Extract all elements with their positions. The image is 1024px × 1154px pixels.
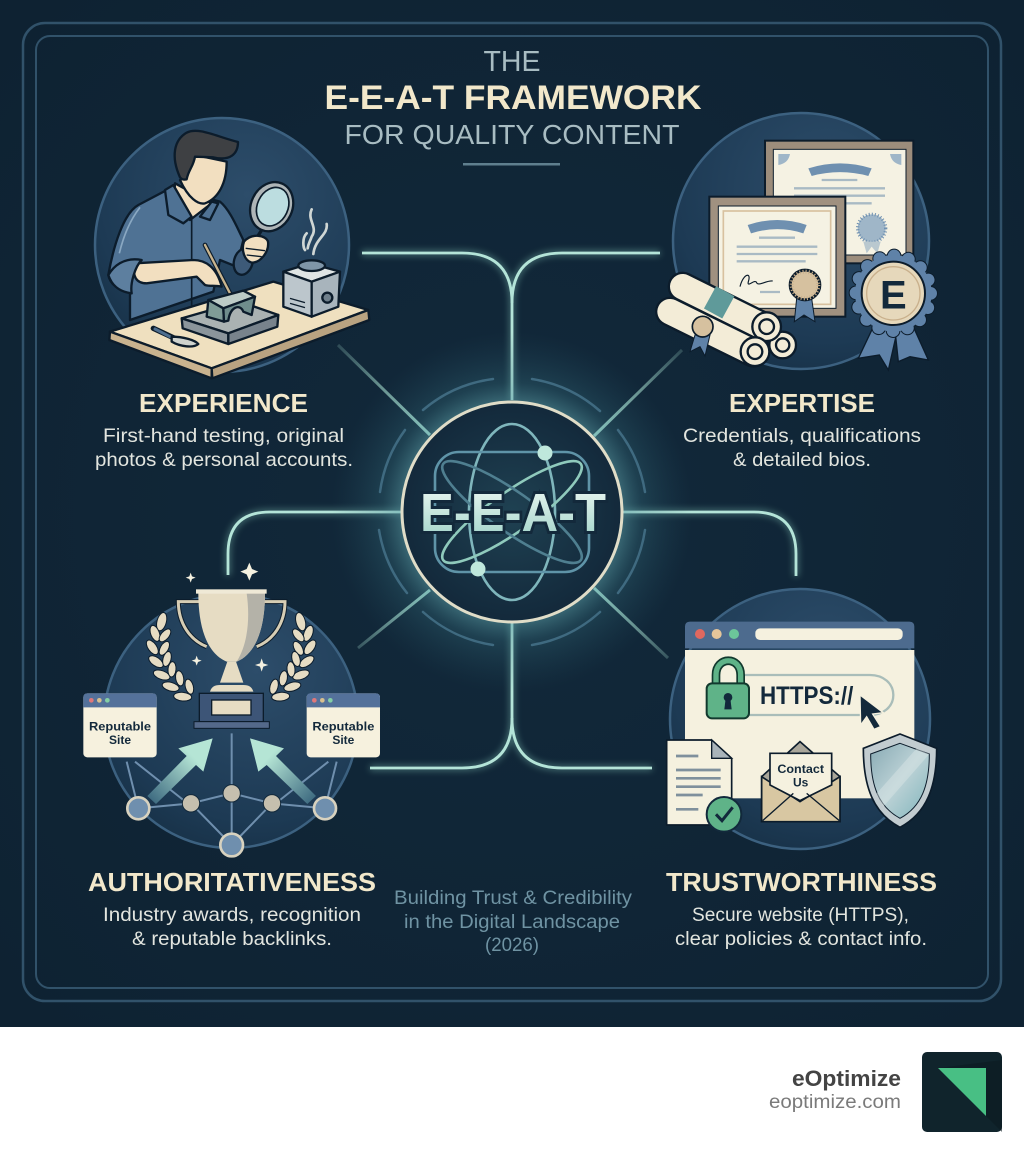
icon: person testing a product: [108, 131, 369, 378]
connector lines: [228, 253, 796, 768]
description: expertise: & detailed bios.: [733, 449, 871, 471]
icon: secure browser window: Contact: [777, 762, 824, 776]
icon: trophy with backlinks: Reputable: [312, 719, 375, 733]
title: THE: [484, 46, 540, 78]
description: experience: First-hand testing, original: [103, 425, 344, 447]
description: expertise: [683, 425, 921, 471]
icon: trophy with backlinks: Site: [109, 733, 131, 747]
tagline: [394, 888, 633, 956]
heading: experience: EXPERIENCE: [139, 388, 308, 418]
panel: trustworthiness: [666, 589, 937, 950]
footer: brand strip: [0, 1027, 1024, 1154]
description: expertise: Credentials, qualifications: [683, 425, 921, 447]
icon: eOptimize logo: [922, 1052, 1002, 1132]
description: trustworthiness: [675, 904, 927, 950]
icon: trophy with backlinks: Reputable: [89, 719, 151, 733]
icon: secure browser window: Us: [793, 775, 809, 789]
icon: secure browser window: HTTPS://: [760, 683, 853, 710]
panel: expertise: [670, 113, 932, 471]
tagline: in the Digital Landscape: [404, 912, 620, 933]
icon: certificates, scrolls and badge: E: [880, 273, 907, 317]
tagline: (2026): [485, 935, 539, 956]
title: [324, 46, 702, 166]
description: authoritativeness: Industry awards, recognition: [103, 904, 361, 926]
icon: trophy with backlinks: Site: [332, 733, 355, 747]
heading: authoritativeness: AUTHORITATIVENESS: [88, 867, 376, 897]
heading: trustworthiness: TRUSTWORTHINESS: [666, 867, 937, 897]
description: experience: photos & personal accounts.: [95, 449, 353, 471]
description: trustworthiness: Secure website (HTTPS),: [692, 904, 909, 926]
panel: authoritativeness: [83, 563, 380, 950]
hub label: E-E-A-T: [420, 483, 606, 543]
description: trustworthiness: clear policies & contact info.: [675, 928, 927, 950]
description: authoritativeness: [103, 904, 361, 950]
icon: atom orbits: [432, 424, 592, 600]
icon: certificates, scrolls and badge: [670, 141, 932, 370]
description: experience: [95, 425, 353, 471]
icon: secure browser window: [667, 622, 937, 832]
brand url: eoptimize.com: [769, 1092, 901, 1113]
title: E-E-A-T FRAMEWORK: [324, 79, 702, 117]
icon: trophy with backlinks: [83, 563, 380, 856]
tagline: Building Trust & Credibility: [394, 888, 633, 909]
description: authoritativeness: & reputable backlinks.: [132, 928, 332, 950]
panel: experience: [95, 118, 369, 471]
central E-E-A-T hub: [332, 332, 692, 692]
brand name: eOptimize: [792, 1066, 901, 1091]
title: FOR QUALITY CONTENT: [344, 119, 680, 150]
heading: expertise: EXPERTISE: [729, 388, 875, 418]
